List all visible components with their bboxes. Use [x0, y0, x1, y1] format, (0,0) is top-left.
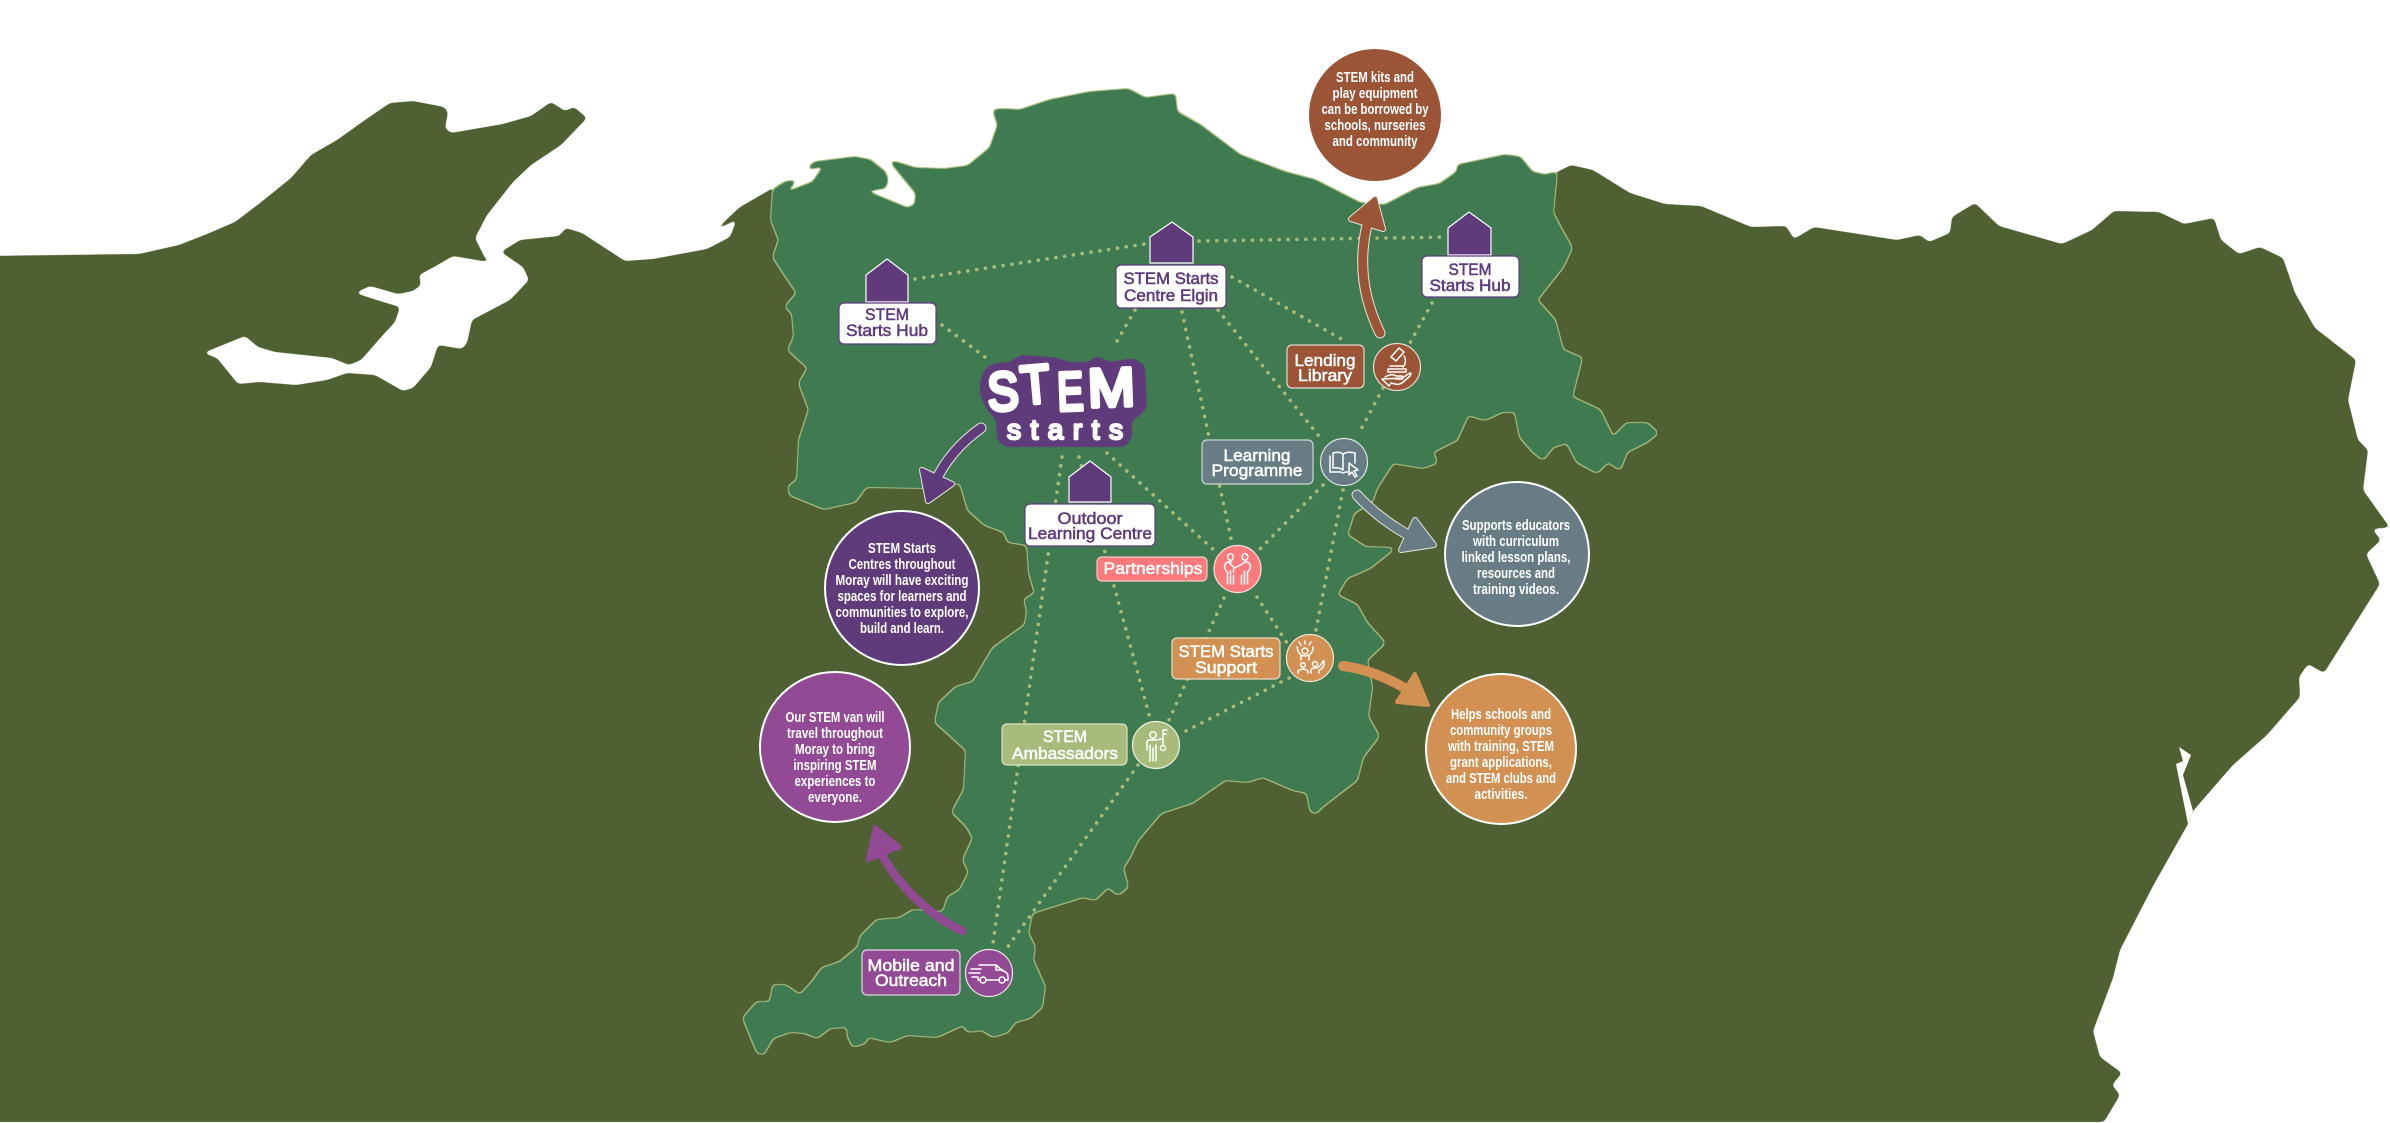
panel: STEM Starts Centres note: communities to explore, [836, 605, 968, 621]
label: Learning Programme: Learning [1224, 446, 1290, 465]
panel: STEM Starts Support note: activities. [1474, 787, 1528, 803]
panel: learning programme note: training videos. [1473, 582, 1559, 598]
panel: mobile and outreach note: inspiring STEM [794, 758, 876, 774]
label: Mobile and Outreach: Mobile and [868, 956, 954, 975]
hub: west STEM Starts Hub: STEM [865, 305, 909, 324]
panel: lending library note: schools, nurseries [1324, 118, 1426, 134]
panel: learning programme note: resources and [1477, 566, 1555, 582]
label: Mobile and Outreach: Outreach [875, 971, 947, 990]
label: STEM Starts Support [1172, 638, 1280, 679]
panel: STEM Starts Centres note: Moray will have exciting [836, 573, 968, 589]
label: Mobile and Outreach [862, 950, 960, 995]
panel: lending library note: STEM kits and [1336, 70, 1414, 86]
label: STEM Starts Support: STEM Starts [1178, 642, 1274, 661]
panel: lending library note: can be borrowed by [1322, 102, 1428, 118]
label: Partnerships [1097, 557, 1207, 581]
logo: STEM starts: E [1056, 362, 1084, 422]
icon: ambassador with key [1132, 722, 1180, 768]
arrow: support to note [1343, 666, 1428, 705]
hub: east STEM Starts Hub: STEM [1448, 260, 1492, 279]
arrow: lending library to note [1351, 199, 1383, 333]
panel: STEM Starts Centres note: Centres throughout [848, 557, 956, 573]
hub: Outdoor Learning Centre: Outdoor [1058, 509, 1123, 528]
hub: east STEM Starts Hub [1422, 212, 1519, 297]
panel: mobile and outreach note: everyone. [808, 790, 862, 806]
panel: STEM Starts Centres note: build and learn. [860, 621, 944, 637]
label: STEM Ambassadors: Ambassadors [1012, 744, 1118, 763]
label: STEM Ambassadors: STEM [1043, 727, 1087, 746]
panel: STEM Starts Centres note: STEM Starts [868, 541, 936, 557]
panel: lending library note: and community [1332, 134, 1418, 150]
panel: mobile and outreach note [760, 672, 910, 822]
panel: mobile and outreach note: travel throughout [787, 726, 883, 742]
arrow: mobile to note [868, 827, 962, 931]
arrow: learning programme to note [1357, 495, 1434, 550]
logo: STEM starts [980, 354, 1147, 447]
icon: microscope in hand [1374, 344, 1420, 390]
label: Learning Programme [1202, 440, 1313, 484]
label: Lending Library: Library [1298, 366, 1353, 385]
logo: STEM starts: starts [1007, 414, 1123, 445]
label: Partnerships: Partnerships [1104, 559, 1202, 578]
panel: learning programme note: linked lesson plans, [1462, 550, 1570, 566]
panel: STEM Starts Support note: grant applications, [1450, 755, 1552, 771]
label: Lending Library [1287, 345, 1364, 388]
panel: learning programme note: with curriculum [1472, 534, 1559, 550]
panel: STEM Starts Support note: with training, STEM [1447, 739, 1554, 755]
hub: Outdoor Learning Centre [1025, 461, 1155, 546]
logo: STEM starts: S [986, 361, 1020, 423]
panel: learning programme note: Supports educators [1462, 518, 1570, 534]
icon: two people shaking hands [1214, 546, 1261, 592]
hub: west STEM Starts Hub: Starts Hub [846, 321, 928, 340]
Moray region [743, 89, 1658, 1055]
hub: east STEM Starts Hub: Starts Hub [1430, 276, 1510, 295]
logo: STEM starts: M [1087, 357, 1136, 419]
panel: STEM Starts Support note: Helps schools and [1451, 707, 1551, 723]
logo: STEM starts: T [1018, 354, 1052, 416]
label: Learning Programme: Programme [1212, 461, 1302, 480]
dotted network connections [915, 237, 1448, 948]
estuary inlet [2176, 747, 2193, 824]
panel: STEM Starts Support note: and STEM clubs and [1446, 771, 1556, 787]
hub: STEM Starts Centre Elgin: Centre Elgin [1124, 286, 1218, 305]
hub: STEM Starts Centre Elgin [1116, 222, 1226, 308]
label: STEM Starts Support: Support [1195, 658, 1257, 677]
icon: book and cursor [1320, 438, 1368, 486]
hub: STEM Starts Centre Elgin: STEM Starts [1124, 269, 1218, 288]
arrow: logo to centres note [922, 428, 981, 501]
panel: learning programme note [1445, 482, 1589, 626]
icon: speeding van [966, 950, 1012, 996]
panel: mobile and outreach note: experiences to [794, 774, 876, 790]
panel: STEM Starts Centres note [825, 511, 979, 665]
panel: STEM Starts Support note [1426, 674, 1576, 824]
icon: celebrating group [1286, 634, 1334, 682]
panel: mobile and outreach note: Moray to bring [795, 742, 875, 758]
label: STEM Ambassadors [1002, 724, 1127, 765]
hub: Outdoor Learning Centre: Learning Centre [1028, 524, 1152, 543]
panel: lending library note [1309, 49, 1441, 181]
panel: STEM Starts Centres note: spaces for learners and [838, 589, 966, 605]
panel: lending library note: play equipment [1332, 86, 1418, 102]
panel: STEM Starts Support note: community groups [1450, 723, 1552, 739]
hub: west STEM Starts Hub [839, 259, 936, 344]
panel: mobile and outreach note: Our STEM van will [786, 710, 884, 726]
label: Lending Library: Lending [1294, 351, 1356, 370]
